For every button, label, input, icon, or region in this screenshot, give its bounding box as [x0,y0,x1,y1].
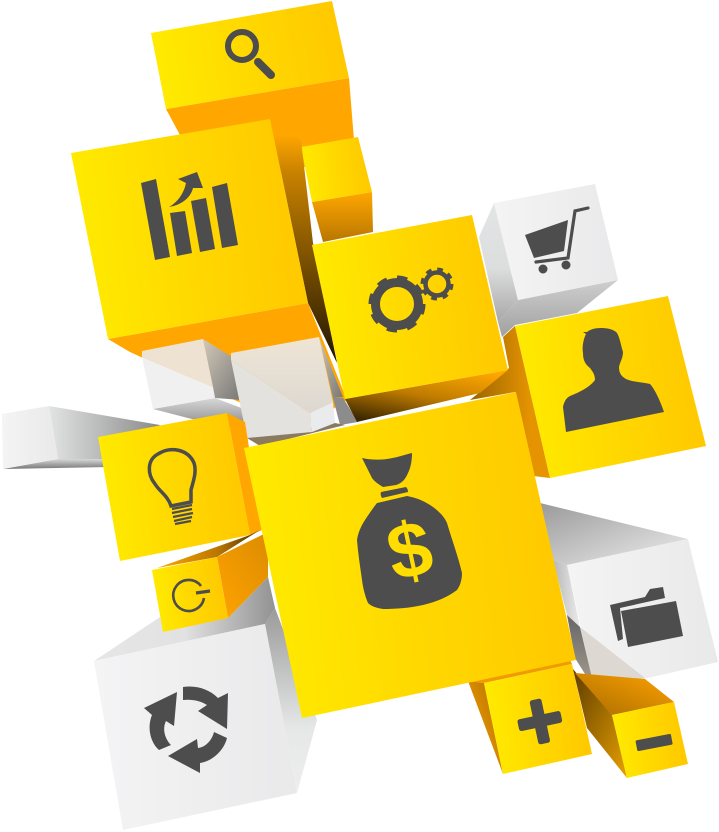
icon: gears [372,270,452,330]
cube: lightbulb [98,413,262,561]
cube: ghost right [231,337,358,446]
cube: person [470,296,706,478]
cube: cart [479,184,618,337]
icon: bar chart with arrow [141,172,238,260]
cube: chart [71,119,347,430]
icon: money bag [357,453,462,609]
cube: folder [540,503,718,690]
cube: ghost left [142,339,310,434]
icon: minus [635,734,673,751]
cube: minus [573,669,688,778]
cube: small blank [301,137,373,242]
cube: gears [312,215,508,422]
icon: person silhouette [563,328,664,432]
dollar sign: $ [379,502,440,598]
cube: left grey beam [2,406,160,469]
icon: power symbol [173,580,210,611]
icon: plus [514,695,566,748]
cube: power [152,530,268,632]
icon: lightbulb [149,450,195,524]
icon: shopping cart [525,208,588,274]
icon: magnifier [228,32,271,75]
icon: recycle arrows [144,686,228,773]
cube: plus [468,660,592,774]
cube: recycle [94,577,317,830]
cube: magnifier [151,1,354,175]
cube: money bag [244,392,576,718]
icon: folders [610,587,683,647]
